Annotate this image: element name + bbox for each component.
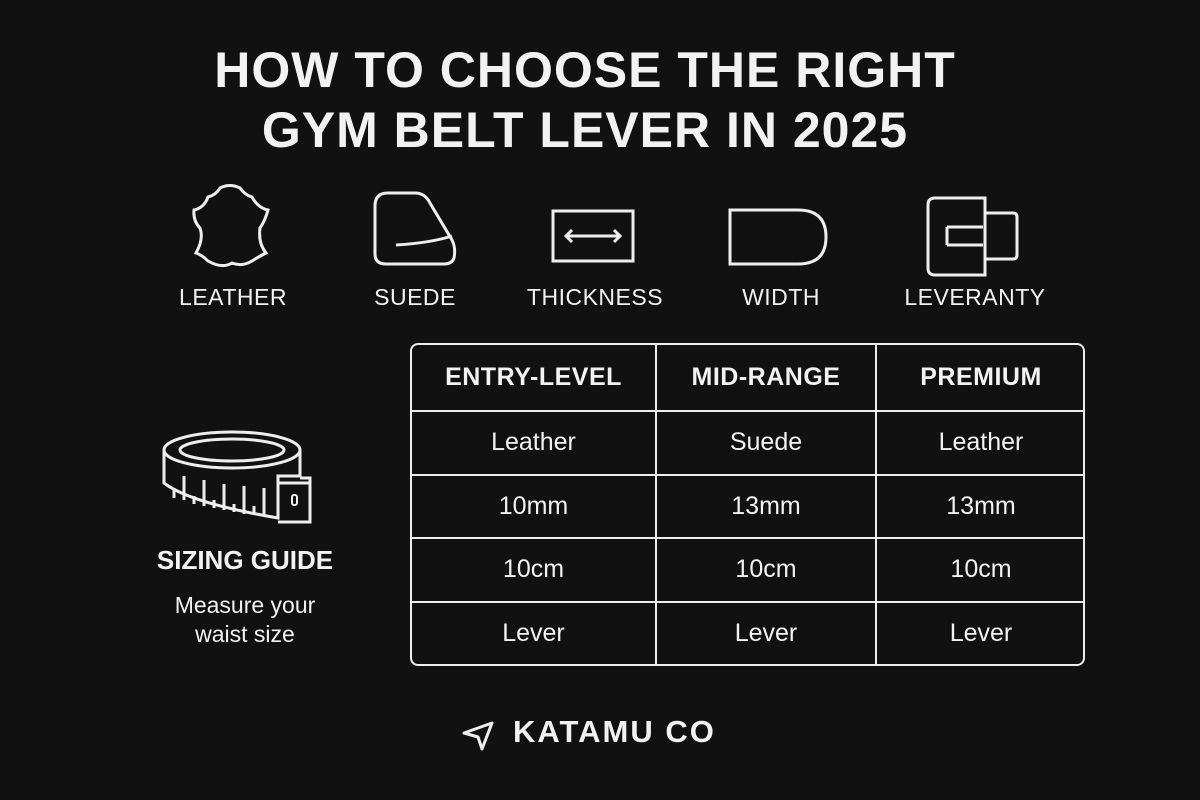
icon: thickness	[552, 210, 634, 262]
sizing text: Measure your	[175, 592, 315, 618]
label: width: WIDTH	[742, 284, 820, 310]
sizing guide panel	[157, 430, 333, 647]
comparison table: ENTRY-LEVEL	[445, 363, 622, 391]
icon: leveranty	[926, 196, 1018, 276]
comparison table: Lever	[735, 619, 797, 647]
comparison table: Leather	[491, 428, 576, 456]
comparison table	[410, 343, 1085, 666]
comparison table: 10cm	[735, 555, 797, 583]
sizing text: waist size	[195, 621, 295, 647]
comparison table: 13mm	[731, 492, 801, 520]
sizing heading: SIZING GUIDE	[157, 545, 333, 575]
comparison table: 10mm	[499, 492, 568, 520]
comparison table: 13mm	[946, 492, 1016, 520]
icon: arrow	[462, 722, 494, 750]
comparison table: Leather	[939, 428, 1023, 456]
comparison table: 10cm	[503, 555, 564, 583]
comparison table: 10cm	[950, 555, 1012, 583]
label: thickness: THICKNESS	[527, 284, 663, 310]
title	[214, 42, 956, 158]
comparison table: Lever	[502, 619, 565, 647]
comparison table: Suede	[730, 428, 802, 456]
comparison table: Lever	[950, 619, 1012, 647]
icon: tape measure	[162, 430, 312, 524]
sizing text	[175, 592, 315, 647]
label: leveranty: LEVERANTY	[904, 284, 1046, 310]
comparison table: MID-RANGE	[692, 363, 840, 391]
brand name: KATAMU CO	[513, 714, 716, 749]
icon row	[192, 184, 1018, 276]
title: HOW TO CHOOSE THE RIGHT	[214, 42, 956, 98]
icon: width	[728, 208, 828, 266]
brand logo	[462, 714, 716, 750]
label: suede: SUEDE	[374, 284, 456, 310]
icon: leather	[192, 184, 270, 268]
comparison table: PREMIUM	[920, 363, 1042, 391]
label: leather: LEATHER	[179, 284, 287, 310]
icon: suede	[374, 192, 456, 266]
title: GYM BELT LEVER IN 2025	[262, 102, 908, 158]
